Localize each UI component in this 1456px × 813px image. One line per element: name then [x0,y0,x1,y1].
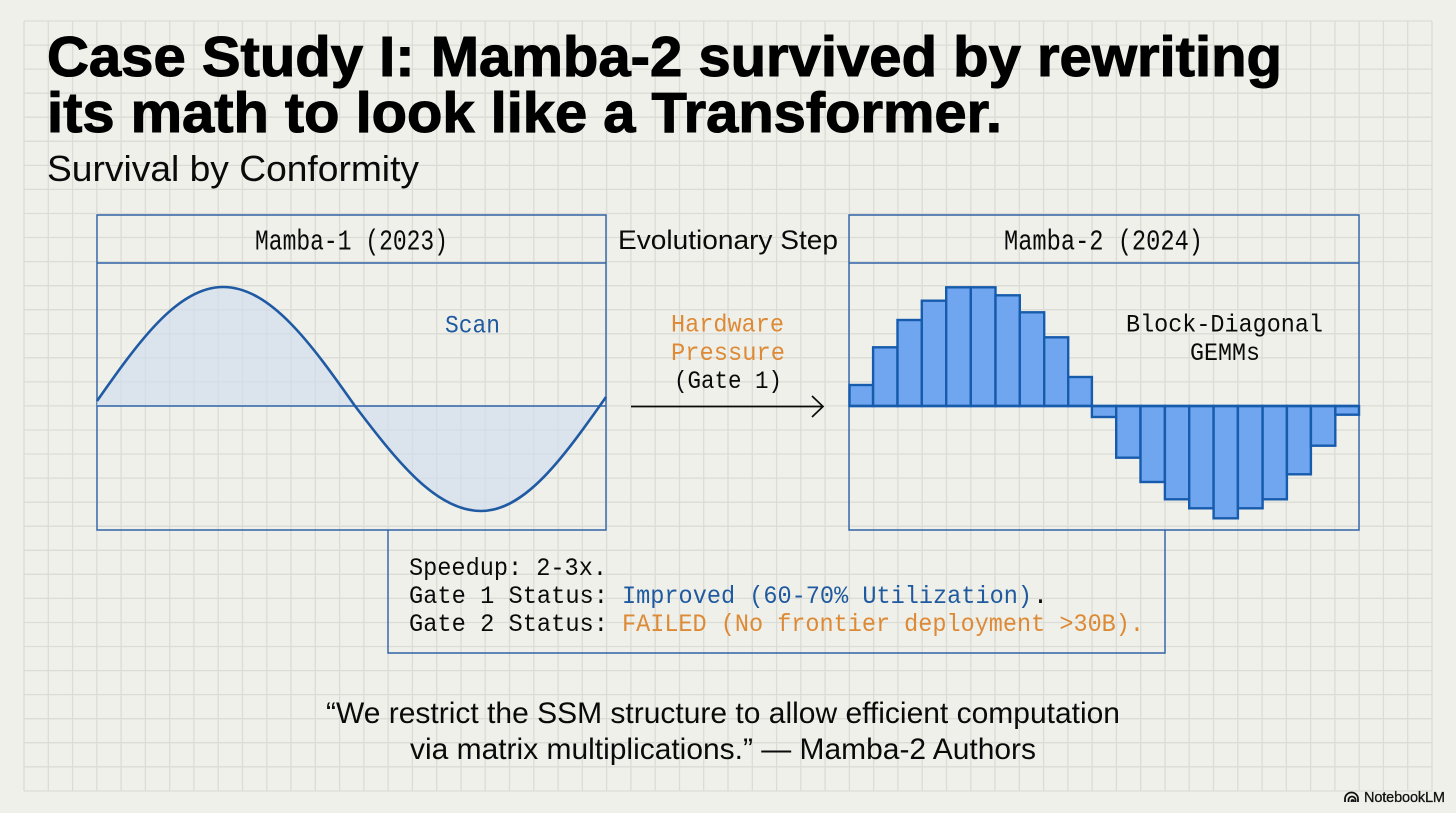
results box [388,530,1165,653]
title [47,25,1282,145]
line: gate 1 status: . [1033,582,1048,611]
arrow [631,396,823,417]
heading: Mamba-1 (2023): Mamba-1 (2023) [255,226,448,258]
label: Block-Diagonal GEMMs [1126,310,1323,368]
panel: Mamba-1 (2023) [97,215,606,530]
label: Scan: Scan [445,312,500,340]
label: Block-Diagonal GEMMs: GEMMs [1190,339,1260,368]
line: gate 1 status: Improved (60-70% Utilization) [622,582,1032,611]
heading: Mamba-2 (2024): Mamba-2 (2024) [1004,226,1203,258]
chart: continuous sine wave [97,287,606,511]
line: gate 2 status [409,610,1144,639]
panel: Evolutionary Step [618,225,838,417]
label: Hardware Pressure (Gate 1): Hardware [671,310,784,340]
heading: Evolutionary Step: Evolutionary Step [618,225,838,255]
quote [326,697,1120,766]
panel frame: Mamba-1 [97,215,606,530]
label: Hardware Pressure (Gate 1): (Gate 1) [674,367,782,396]
line: gate 2 status: Gate 2 Status: [409,610,608,639]
quote: “We restrict the SSM structure to allow efficient computation [326,697,1120,730]
quote: via matrix multiplications.” — Mamba-2 Authors [410,733,1036,766]
panel frame: Mamba-2 [849,215,1359,530]
line: gate 1 status [409,582,1048,611]
line: gate 2 status: FAILED (No frontier deployment >30B). [622,610,1144,639]
wordmark: NotebookLM [1364,790,1445,806]
title: Case Study I: Mamba-2 survived by rewriting [47,25,1282,89]
chart: block-diagonal bars [849,287,1359,518]
subtitle: Survival by Conformity [47,148,419,189]
label: Block-Diagonal GEMMs: Block-Diagonal [1126,310,1323,340]
results frame [388,530,1165,653]
NotebookLM logo [1345,790,1445,806]
line: speedup: Speedup: 2-3x. [409,554,607,583]
label: Hardware Pressure (Gate 1): Pressure [671,339,785,368]
title: its math to look like a Transformer. [47,81,1002,145]
label: Hardware Pressure (Gate 1) [671,310,785,396]
icon: NotebookLM [1345,792,1358,802]
panel: Mamba-2 (2024) [849,215,1359,530]
line: gate 1 status: Gate 1 Status: [409,582,608,611]
